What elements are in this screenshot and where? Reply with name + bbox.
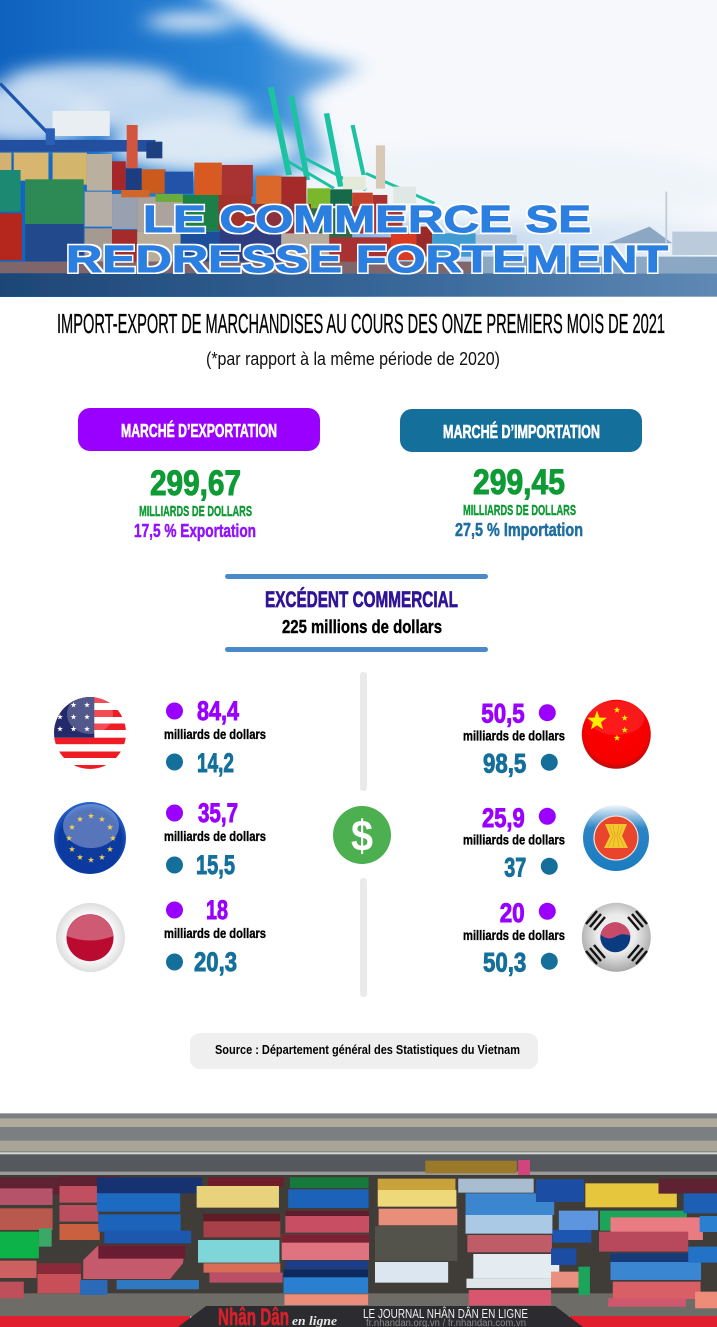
blue crane — [0, 83, 48, 133]
export figure: 20 — [500, 898, 525, 928]
import figure: 50,3 — [483, 948, 526, 978]
export figure: 25,9 — [482, 803, 525, 833]
export unit: MILLIARDS DE DOLLARS — [139, 503, 252, 520]
icon: ASEAN flag — [583, 805, 649, 871]
panel: export market — [78, 408, 320, 541]
icon: dollar — [333, 806, 391, 864]
export button: MARCHÉ D’EXPORTATION — [121, 420, 277, 441]
central divider with dollar icon — [333, 672, 391, 997]
row: ASEAN — [463, 803, 649, 883]
title — [66, 199, 668, 281]
unit: milliards de dollars — [164, 726, 266, 742]
source note — [190, 1033, 538, 1069]
import figure — [166, 748, 234, 778]
unit: milliards de dollars — [463, 832, 565, 848]
teal cranes — [271, 87, 434, 203]
import unit: MILLIARDS DE DOLLARS — [463, 502, 576, 519]
sea — [476, 257, 717, 273]
export figure: 50,5 — [481, 699, 525, 729]
import figure — [504, 853, 558, 883]
panel: import market — [400, 409, 642, 540]
footer photo: stacked containers from above — [0, 1113, 717, 1327]
export figure — [166, 895, 228, 925]
title: REDRESSE FORTEMENT — [66, 239, 668, 281]
export figure: 18 — [206, 895, 228, 925]
panel: trade surplus — [225, 574, 488, 652]
hero photo: port with containers and cranes — [0, 0, 717, 297]
icon: China flag — [582, 700, 651, 769]
row: South Korea — [463, 898, 651, 978]
icon: dollar: $ — [351, 812, 373, 861]
source note: Source : Département général des Statistiques du Vietnam — [215, 1043, 520, 1057]
export figure — [166, 696, 239, 726]
export figure: 84,4 — [197, 696, 239, 726]
export value: 299,67 — [150, 464, 241, 503]
icon: US flag — [54, 694, 126, 770]
row: China — [463, 699, 651, 779]
subtitle: (*par rapport à la même période de 2020) — [206, 349, 500, 369]
import figure — [166, 850, 235, 880]
row: United States — [54, 694, 266, 778]
import growth: 27,5 % Importation — [455, 520, 583, 540]
row: Japan — [56, 895, 266, 977]
import value: 299,45 — [473, 463, 565, 502]
export growth: 17,5 % Exportation — [134, 521, 256, 541]
import figure: 14,2 — [197, 748, 234, 778]
distant hill and chimney — [608, 227, 672, 243]
import button: MARCHÉ D’IMPORTATION — [443, 421, 600, 442]
import figure: 37 — [504, 853, 526, 883]
icon: Japan flag — [56, 903, 125, 972]
export figure — [500, 898, 556, 928]
title: LE COMMERCE SE — [143, 199, 591, 241]
import button — [400, 409, 642, 452]
surplus heading: EXCÉDENT COMMERCIAL — [265, 587, 458, 612]
export button — [78, 408, 320, 451]
row: European Union — [54, 798, 266, 880]
unit: milliards de dollars — [164, 925, 266, 941]
surplus value: 225 millions de dollars — [282, 617, 442, 637]
icon: South Korea flag — [582, 903, 651, 972]
import figure — [166, 947, 237, 977]
unit: milliards de dollars — [463, 927, 565, 943]
containers — [0, 153, 11, 173]
import figure: 98,5 — [483, 749, 526, 779]
unit: milliards de dollars — [463, 728, 565, 744]
unit: milliards de dollars — [164, 828, 266, 844]
journal name: LE JOURNAL NHÂN DÂN EN LIGNE — [363, 1306, 528, 1321]
export figure: 35,7 — [198, 798, 238, 828]
export figure — [166, 798, 238, 828]
import figure: 20,3 — [194, 947, 237, 977]
icon: EU flag — [54, 802, 126, 874]
footer banner — [0, 1304, 717, 1327]
import figure: 15,5 — [196, 850, 235, 880]
